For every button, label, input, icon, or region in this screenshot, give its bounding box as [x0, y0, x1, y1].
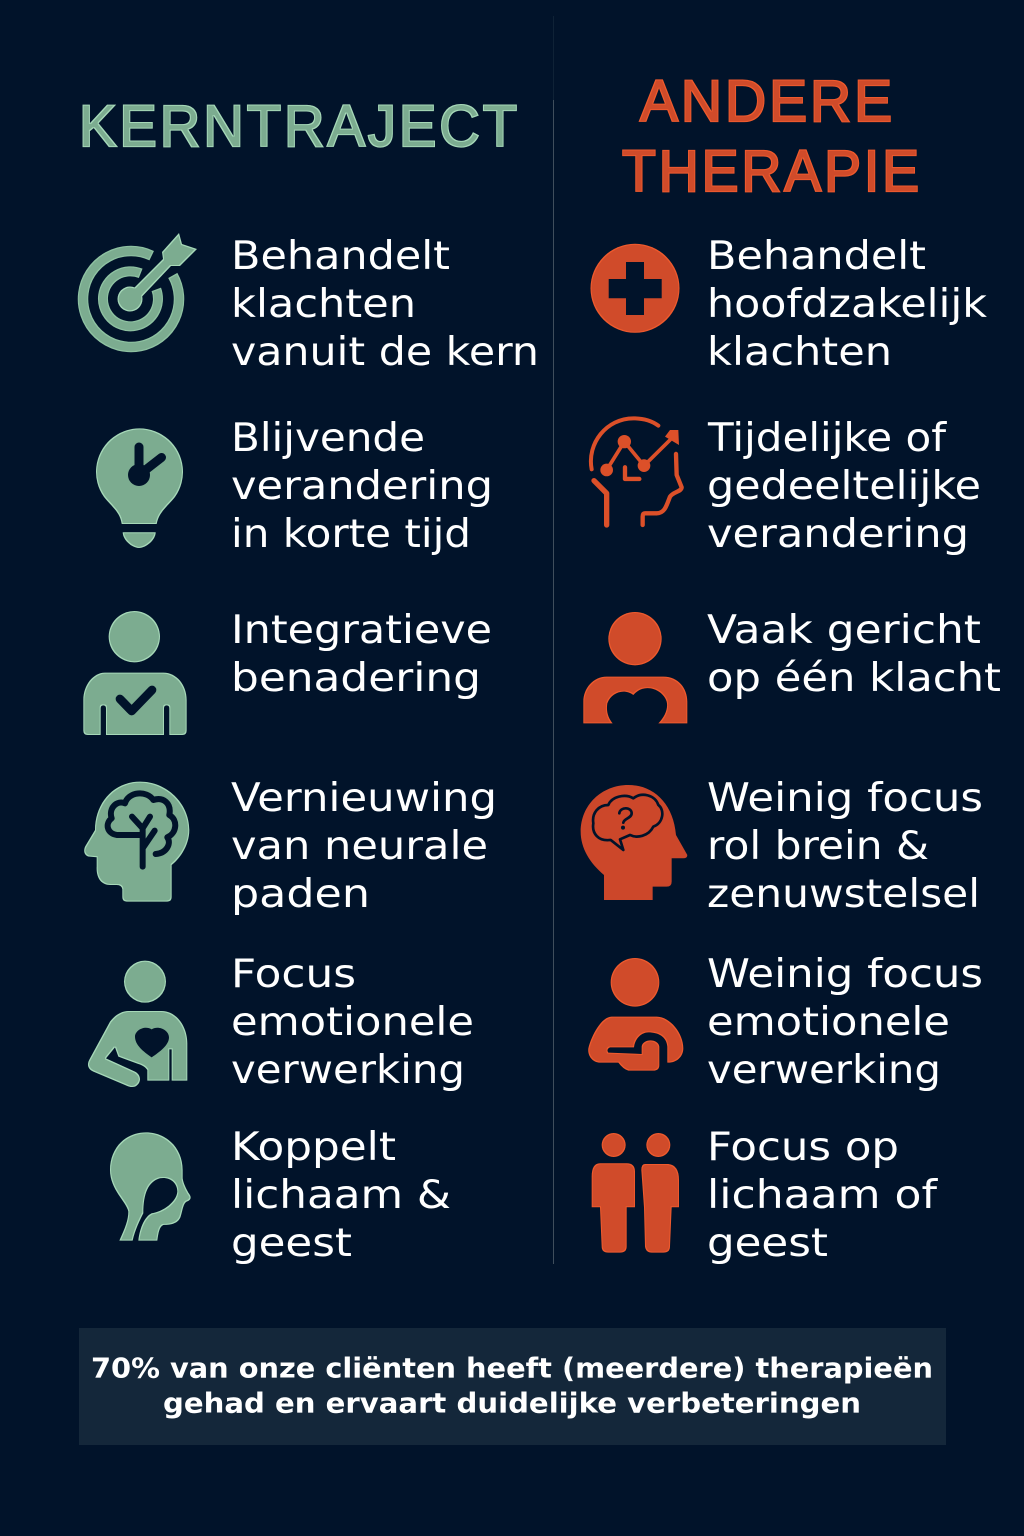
text: integratieve benadering	[231, 608, 492, 701]
text: tijdelijke of gedeeltelijke verandering	[707, 416, 981, 557]
text: focus op lichaam of geest	[707, 1125, 938, 1266]
text: vernieuwing van neurale paden: paden	[231, 872, 370, 917]
callout: 70 percent banner: 70% van onze cliënten heeft (meerdere) therapieën	[91, 1352, 933, 1384]
text: blijvende verandering in korte tijd: verandering	[231, 464, 493, 509]
text: vaak gericht op een klacht: op één klacht	[707, 656, 1001, 701]
text: weinig focus rol brein en zenuwstelsel: zenuwstelsel	[707, 872, 980, 917]
text: behandelt hoofdzakelijk klachten	[707, 234, 987, 375]
text: weinig focus emotionele verwerking	[707, 952, 983, 1093]
icon: person with folded arms	[588, 958, 683, 1071]
text: weinig focus emotionele verwerking: verwerking	[707, 1048, 941, 1093]
text: behandelt hoofdzakelijk klachten: hoofdzakelijk	[707, 282, 987, 327]
icon: head with brain tree	[84, 782, 189, 902]
text: focus emotionele verwerking: verwerking	[231, 1048, 465, 1093]
text: koppelt lichaam en geest: Koppelt	[231, 1125, 396, 1170]
text: focus emotionele verwerking: Focus	[231, 952, 356, 997]
icon: target with arrow	[83, 233, 197, 347]
icon: person with check	[83, 611, 187, 735]
callout: 70 percent banner	[79, 1328, 946, 1445]
text: behandelt klachten vanuit de kern: Behandelt	[231, 234, 450, 279]
heading: Andere therapie: ANDERE	[640, 69, 895, 134]
icon: head with chart	[591, 418, 682, 525]
text: blijvende verandering in korte tijd: Blijvende	[231, 416, 425, 461]
heading: Andere therapie	[622, 69, 922, 204]
text: tijdelijke of gedeeltelijke verandering: verandering	[707, 512, 969, 557]
text: weinig focus rol brein en zenuwstelsel	[707, 776, 983, 917]
heading: Andere therapie: THERAPIE	[622, 139, 922, 204]
text: vaak gericht op een klacht: Vaak gericht	[707, 608, 981, 653]
icon: bulb with clock	[96, 428, 183, 548]
text: vernieuwing van neurale paden: Vernieuwing	[231, 776, 497, 821]
text: tijdelijke of gedeeltelijke verandering: gedeeltelijke	[707, 464, 981, 509]
icon: person with heart	[88, 961, 187, 1087]
icon: two people	[592, 1133, 679, 1253]
text: koppelt lichaam en geest: geest	[231, 1221, 352, 1266]
text: focus op lichaam of geest: geest	[707, 1221, 828, 1266]
callout: 70 percent banner: gehad en ervaart duidelijke verbeteringen	[163, 1386, 861, 1420]
text: behandelt hoofdzakelijk klachten: klachten	[707, 330, 892, 375]
text: focus emotionele verwerking	[231, 952, 474, 1093]
text: blijvende verandering in korte tijd	[231, 416, 493, 557]
text: koppelt lichaam en geest: lichaam &	[231, 1173, 451, 1218]
text: behandelt klachten vanuit de kern: vanuit de kern	[231, 330, 539, 375]
text: weinig focus rol brein en zenuwstelsel: rol brein &	[707, 824, 929, 869]
text: focus emotionele verwerking: emotionele	[231, 1000, 474, 1045]
text: focus op lichaam of geest: Focus op	[707, 1125, 899, 1170]
icon: head with question cloud	[581, 785, 687, 900]
text: integratieve benadering: benadering	[231, 656, 481, 701]
icon: person with heart cutout	[583, 612, 687, 723]
text: tijdelijke of gedeeltelijke verandering: Tijdelijke of	[707, 416, 947, 461]
text: focus op lichaam of geest: lichaam of	[707, 1173, 938, 1218]
text: weinig focus emotionele verwerking: emotionele	[707, 1000, 950, 1045]
text: behandelt klachten vanuit de kern: klachten	[231, 282, 416, 327]
icon: head profile body and mind	[110, 1132, 191, 1241]
text: weinig focus rol brein en zenuwstelsel: Weinig focus	[707, 776, 983, 821]
text: blijvende verandering in korte tijd: in korte tijd	[231, 512, 471, 557]
heading: Kerntraject: KERNTRAJECT	[79, 94, 520, 159]
text: behandelt klachten vanuit de kern	[231, 234, 539, 375]
text: weinig focus emotionele verwerking: Weinig focus	[707, 952, 983, 997]
text: vaak gericht op een klacht	[707, 608, 1001, 701]
text: koppelt lichaam en geest	[231, 1125, 451, 1266]
text: vernieuwing van neurale paden: van neurale	[231, 824, 488, 869]
text: vernieuwing van neurale paden	[231, 776, 497, 917]
icon: medical cross	[590, 244, 680, 333]
text: behandelt hoofdzakelijk klachten: Behandelt	[707, 234, 926, 279]
text: integratieve benadering: Integratieve	[231, 608, 492, 653]
